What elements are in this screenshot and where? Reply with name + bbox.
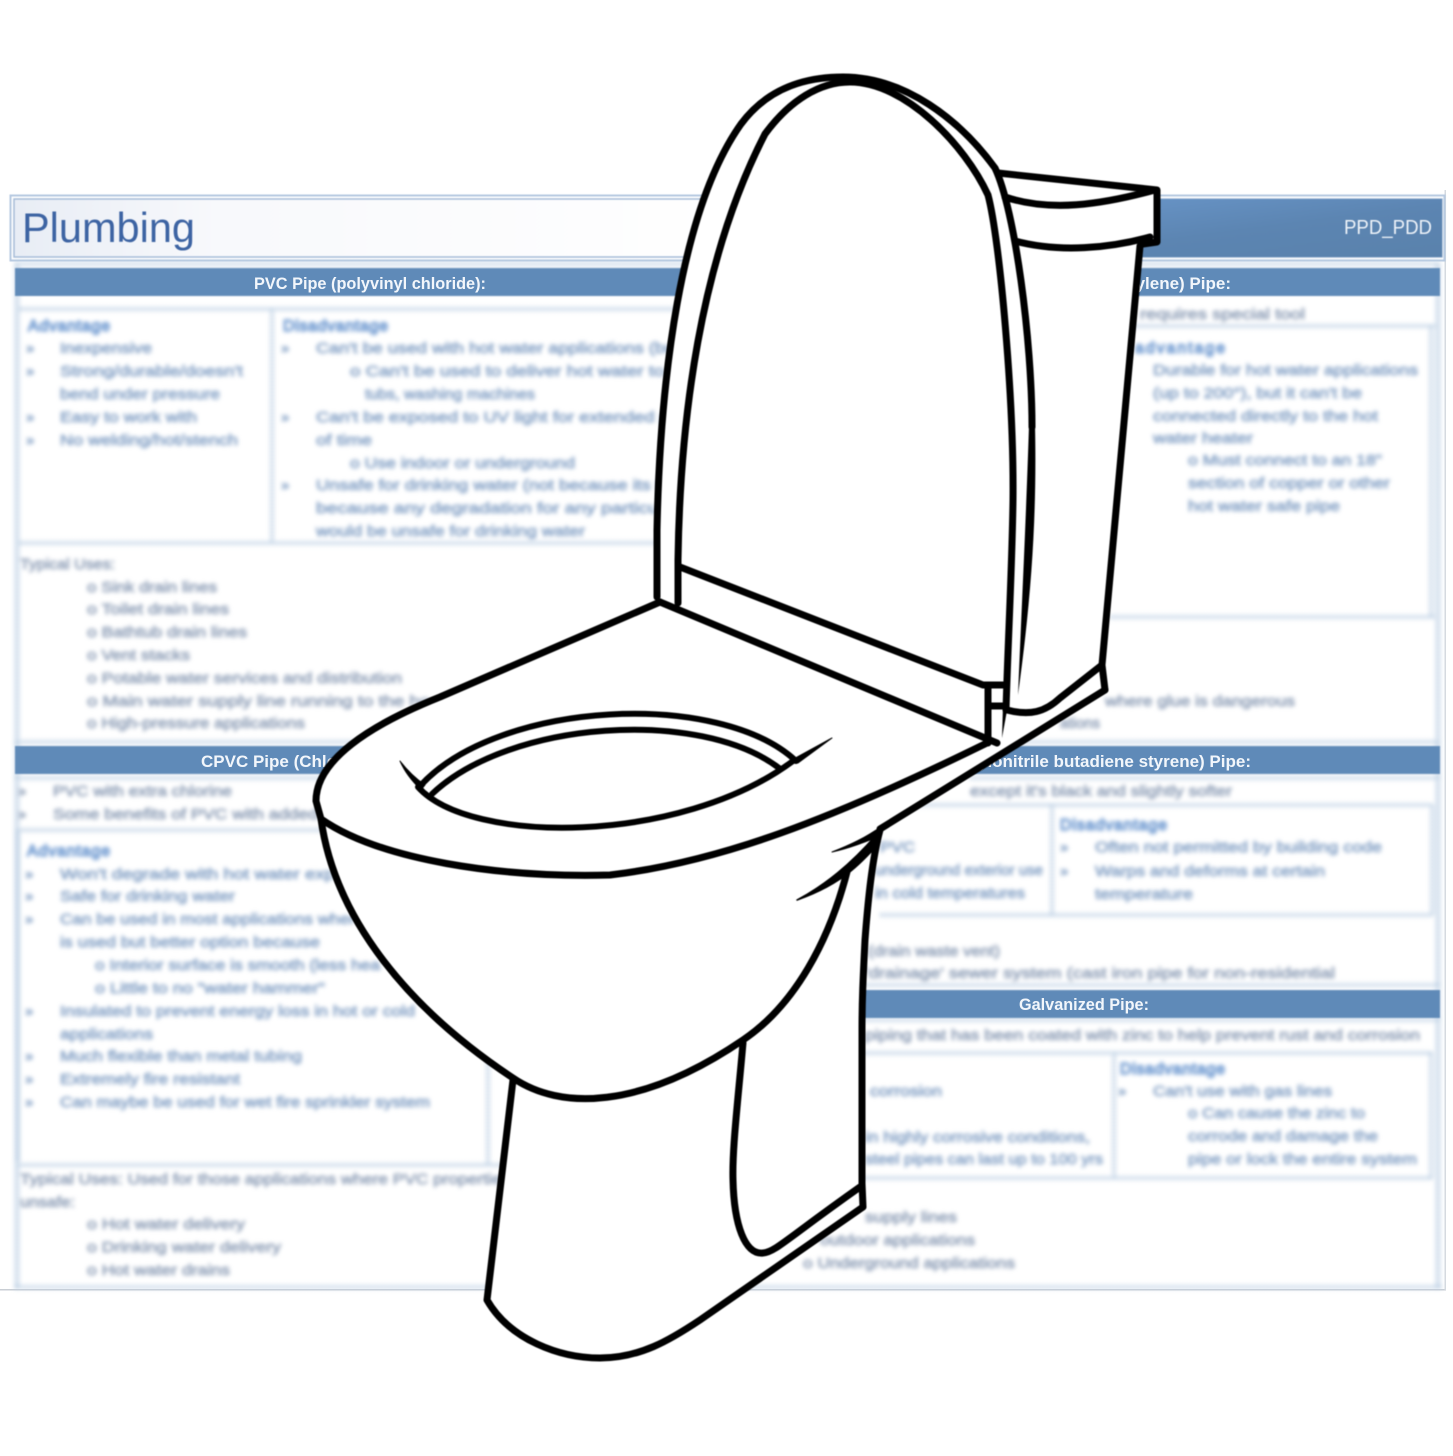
panel: CPVC: » bbox=[18, 806, 26, 823]
blurred body text bbox=[18, 306, 1420, 1279]
panel: Galvanized: » bbox=[1118, 1083, 1126, 1100]
panel: PVC advantages: Advantage bbox=[28, 318, 110, 335]
panel: PVC typical uses: o Vent stacks bbox=[87, 647, 190, 664]
panel: CPVC: unsafe: bbox=[20, 1194, 75, 1211]
panel: Galvanized: Disadvantage bbox=[1120, 1061, 1225, 1078]
bar: CPVC and ABS: CPVC Pipe (Chlorinated polyvinyl chloride): bbox=[201, 752, 554, 771]
panel: PVC disadvantages: o Use indoor or underground bbox=[350, 455, 575, 472]
panel: PEX: section of copper or other bbox=[1188, 475, 1390, 492]
panel: PEX: hot water safe pipe bbox=[1188, 498, 1340, 515]
panel: PEX: ations bbox=[1060, 715, 1100, 732]
panel: Galvanized: piping that has been coated with zinc to help prevent rust and corrosion bbox=[865, 1027, 1420, 1044]
panel: PVC advantages: » bbox=[26, 409, 34, 426]
panel: PVC disadvantages: Can't be exposed to UV light for extended pe bbox=[316, 409, 680, 426]
panel: ABS: Disadvantage bbox=[1060, 817, 1167, 834]
panel: CPVC: » bbox=[25, 1003, 33, 1020]
panel: ABS: Often not permitted by building code bbox=[1095, 839, 1382, 856]
panel: PVC disadvantages: tubs, washing machines bbox=[365, 386, 535, 403]
panel: PVC typical uses: o Bathtub drain lines bbox=[87, 624, 247, 641]
panel: PVC disadvantages: » bbox=[281, 409, 289, 426]
panel: PEX: connected directly to the hot bbox=[1153, 408, 1379, 425]
code label: PPD_PDD bbox=[1344, 217, 1432, 239]
panel: CPVC: Some benefits of PVC with added bbox=[53, 806, 318, 823]
toilet bowl bbox=[321, 819, 882, 1099]
panel: PVC advantages: » bbox=[26, 363, 34, 380]
panel: CPVC: Advantage bbox=[27, 843, 110, 860]
panel: PVC disadvantages: Can't be used with hot water applications (but bbox=[316, 340, 681, 357]
panel: PEX: (up to 200°), but it can't be bbox=[1153, 385, 1362, 402]
page frame lines bbox=[0, 190, 1446, 1290]
panel: PEX bbox=[1060, 306, 1418, 732]
panel: Galvanized: o Can cause the zinc to bbox=[1188, 1105, 1365, 1122]
panel: CPVC: » bbox=[25, 866, 33, 883]
panel: CPVC: Much flexible than metal tubing bbox=[60, 1048, 302, 1065]
panel: CPVC: » bbox=[25, 888, 33, 905]
panel: PVC advantages: Strong/durable/doesn't bbox=[60, 363, 244, 380]
panel: CPVC: is used but better option because bbox=[60, 934, 320, 951]
panel: PEX: requires special tool bbox=[1140, 306, 1305, 323]
icon: toilet line drawing bbox=[316, 77, 1157, 1358]
bar: Galvanized Pipe bbox=[490, 990, 1440, 1018]
panel: ABS: underground exterior use bbox=[875, 862, 1043, 879]
panel: PEX: o Must connect to an 18" bbox=[1188, 452, 1382, 469]
panel: Galvanized: corrode and damage the bbox=[1188, 1128, 1378, 1145]
panel: CPVC: o Interior surface is smooth (less hea bbox=[95, 957, 381, 974]
panel: CPVC: o Drinking water delivery bbox=[87, 1239, 282, 1256]
panel: CPVC: Extremely fire resistant bbox=[60, 1071, 241, 1088]
panel: CPVC: o Hot water delivery bbox=[87, 1216, 246, 1233]
panel: CPVC: PVC with extra chlorine bbox=[53, 783, 232, 800]
panel: ABS bbox=[865, 783, 1382, 982]
panel: PEX: Durable for hot water applications bbox=[1153, 362, 1418, 379]
panel: CPVC: » bbox=[25, 1048, 33, 1065]
panel: CPVC: o Little to no "water hammer" bbox=[95, 980, 325, 997]
panel: PVC disadvantages: » bbox=[281, 477, 289, 494]
bar: CPVC and ABS bbox=[15, 746, 1440, 774]
panel: PEX: where glue is dangerous bbox=[1104, 693, 1295, 710]
panel: ABS: Warps and deforms at certain bbox=[1095, 863, 1325, 880]
panel: PVC advantages: bend under pressure bbox=[60, 386, 220, 403]
panel: CPVC: Typical Uses: Used for those applications where PVC properties bbox=[20, 1171, 510, 1188]
bar: Galvanized Pipe: Galvanized Pipe: bbox=[1019, 995, 1149, 1014]
panel: Galvanized: pipe or lock the entire system bbox=[1188, 1151, 1417, 1168]
panel: PVC typical uses bbox=[20, 556, 430, 732]
panel: PVC typical uses: Typical Uses: bbox=[20, 556, 115, 573]
panel: CPVC: o Hot water drains bbox=[87, 1262, 230, 1279]
panel: PVC disadvantages: » bbox=[281, 340, 289, 357]
panel: PVC disadvantages: would be unsafe for drinking water bbox=[315, 523, 585, 540]
panel: CPVC: Insulated to prevent energy loss in hot or cold bbox=[60, 1003, 415, 1020]
panel: Galvanized: corrosion bbox=[870, 1083, 942, 1100]
section header bars bbox=[15, 268, 1440, 1018]
panel: PVC advantages: Inexpensive bbox=[60, 340, 152, 357]
panel: CPVC: Safe for drinking water bbox=[60, 888, 235, 905]
panel: PEX: water heater bbox=[1152, 430, 1253, 447]
panel: PVC advantages: » bbox=[26, 432, 34, 449]
toilet seat opening bbox=[400, 714, 832, 828]
panel: Galvanized: outdoor applications bbox=[820, 1232, 975, 1249]
panel: CPVC: Can be used in most applications wher bbox=[60, 911, 355, 928]
toilet tank bbox=[998, 173, 1157, 713]
bar: CPVC and ABS: ABS (acrylonitrile butadiene styrene) Pipe: bbox=[906, 752, 1251, 771]
dotted panel rules bbox=[15, 264, 1442, 1288]
panel: ABS: 'drainage' sewer system (cast iron pipe for non-residential bbox=[865, 965, 1335, 982]
toilet white fills bbox=[316, 77, 1157, 1358]
panel: PVC disadvantages: because any degradation for any particular bbox=[316, 500, 680, 517]
panel: PVC typical uses: o Toilet drain lines bbox=[87, 601, 229, 618]
panel: CPVC: » bbox=[25, 911, 33, 928]
panel: ABS: » bbox=[1060, 863, 1068, 880]
panel: PEX: advantage bbox=[1135, 340, 1225, 357]
panel: ABS: PVC bbox=[880, 839, 915, 856]
panel: PVC advantages bbox=[26, 318, 244, 449]
bar: PEX Pipe: PEX (cross-linked polyethylene) Pipe: bbox=[926, 274, 1231, 293]
panel: PVC disadvantages: of time bbox=[316, 432, 372, 449]
panel: PVC disadvantages: o Can't be used to deliver hot water to a bbox=[350, 363, 681, 380]
toilet seat outline bbox=[316, 602, 1105, 875]
panel: ABS: except it's black and slightly softer bbox=[970, 783, 1232, 800]
panel: CPVC bbox=[18, 783, 510, 1279]
panel: PVC disadvantages: Disadvantage bbox=[283, 318, 388, 335]
title: Plumbing bbox=[22, 204, 195, 251]
panel: PVC disadvantages bbox=[281, 318, 681, 540]
panel: Galvanized: in highly corrosive conditions, bbox=[865, 1129, 1090, 1146]
panel: CPVC: Can maybe be used for wet fire sprinkler system bbox=[60, 1094, 430, 1111]
panel: PVC typical uses: o High-pressure applications bbox=[87, 715, 305, 732]
panel: ABS: temperature bbox=[1095, 886, 1193, 903]
toilet hinge and seat back bbox=[660, 567, 1005, 743]
panel: PVC advantages: Easy to work with bbox=[60, 409, 197, 426]
panel: Galvanized: o Underground applications bbox=[803, 1255, 1015, 1272]
panel: Galvanized: Can't use with gas lines bbox=[1153, 1083, 1332, 1100]
panel: PVC typical uses: o Sink drain lines bbox=[87, 579, 217, 596]
panel: CPVC: applications bbox=[60, 1026, 153, 1043]
panel: PVC typical uses: o Potable water services and distribution bbox=[87, 670, 402, 687]
bar: PVC Pipe bbox=[15, 268, 1440, 296]
header band bbox=[10, 196, 1444, 260]
panel: PVC advantages: » bbox=[26, 340, 34, 357]
panel: CPVC: » bbox=[18, 783, 26, 800]
panel: ABS: » bbox=[1060, 839, 1068, 856]
panel: PVC disadvantages: Unsafe for drinking water (not because its tox bbox=[316, 477, 681, 494]
panel: ABS: (drain waste vent) bbox=[868, 943, 1000, 960]
bar: PVC Pipe: PVC Pipe (polyvinyl chloride): bbox=[254, 274, 486, 293]
toilet pedestal bbox=[487, 830, 880, 1358]
panel: ABS: in cold temperatures bbox=[875, 885, 1025, 902]
toilet lid bbox=[657, 77, 1035, 738]
panel: PVC typical uses: o Main water supply line running to the ho bbox=[87, 693, 430, 710]
panel: Galvanized: supply lines bbox=[865, 1209, 957, 1226]
panel: Galvanized bbox=[803, 1027, 1420, 1272]
panel: Galvanized: steel pipes can last up to 100 yrs bbox=[865, 1151, 1103, 1168]
panel: PVC advantages: No welding/hot/stench bbox=[60, 432, 238, 449]
panel: CPVC: » bbox=[25, 1094, 33, 1111]
panel: CPVC: Won't degrade with hot water exp bbox=[60, 866, 335, 883]
panel: CPVC: » bbox=[25, 1071, 33, 1088]
